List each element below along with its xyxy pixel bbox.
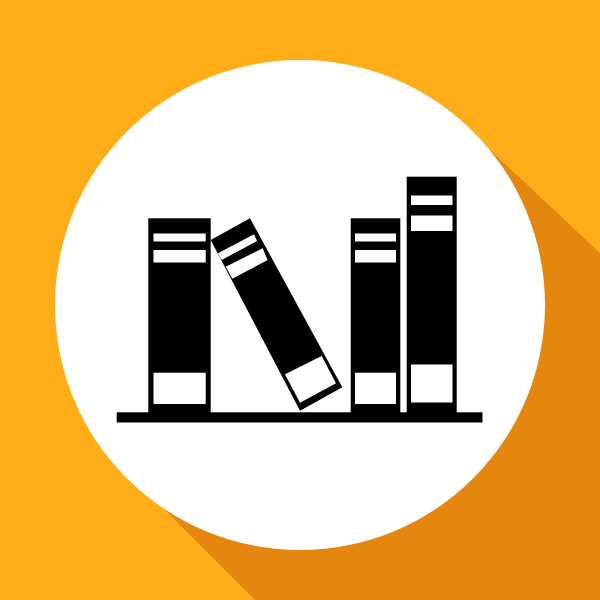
shelf xyxy=(117,412,482,422)
book: tall right xyxy=(407,177,457,413)
long diagonal shadow xyxy=(153,148,600,600)
white circle xyxy=(55,60,545,550)
book: left upright xyxy=(148,218,211,413)
book: leaning xyxy=(211,218,342,411)
book: third upright xyxy=(351,218,400,413)
